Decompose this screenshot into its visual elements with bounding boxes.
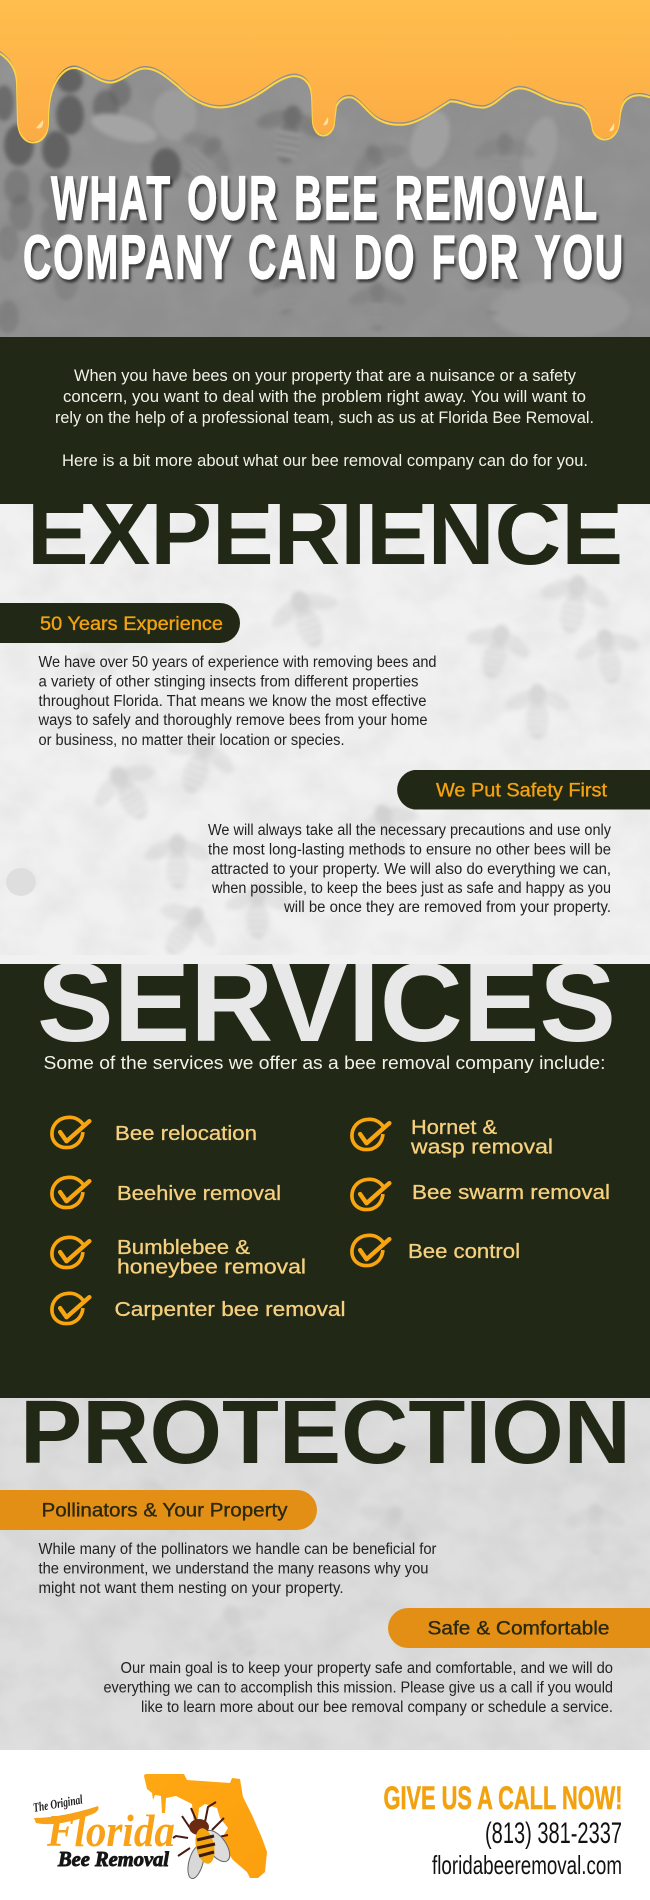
service: hornet and wasp removal: wasp removal bbox=[410, 1136, 553, 1158]
service: bee relocation: Bee relocation bbox=[115, 1123, 257, 1145]
text: safe and comfortable: Our main goal is to keep your property safe and comfortable, and we will do bbox=[120, 1660, 613, 1677]
heading: protection: PROTECTION bbox=[20, 1383, 631, 1483]
logo: orange swoosh bbox=[34, 1806, 99, 1824]
pill: 50 years experience: 50 Years Experience bbox=[40, 614, 223, 635]
text: we put safety first: attracted to your property. We will also do everything we can, bbox=[211, 861, 611, 878]
service: beehive removal: Beehive removal bbox=[117, 1183, 281, 1205]
service: beehive removal bbox=[52, 1177, 281, 1208]
text: 50 years experience bbox=[38, 654, 436, 749]
panel: experience background bbox=[0, 504, 650, 974]
pill: we put safety first: We Put Safety First bbox=[436, 780, 608, 802]
text: 50 years experience: or business, no matter their location or species. bbox=[38, 732, 344, 749]
section: we put safety first bbox=[208, 770, 650, 916]
title bbox=[23, 164, 625, 292]
text: 50 years experience: a variety of other stinging insects from different properties bbox=[38, 674, 419, 690]
service: bee swarm removal bbox=[352, 1179, 610, 1210]
panel: intro band bbox=[0, 337, 650, 504]
pill: 50 years experience bbox=[0, 603, 240, 643]
text: we put safety first: will be once they are removed from your property. bbox=[283, 899, 611, 916]
pill: we put safety first bbox=[397, 770, 650, 810]
service: bee swarm removal: Bee swarm removal bbox=[412, 1182, 610, 1204]
honey drip bbox=[0, 0, 650, 142]
text: 50 years experience: throughout Florida. That means we know the most effective bbox=[38, 693, 426, 710]
service: carpenter bee removal bbox=[52, 1293, 345, 1324]
pill: pollinators and your property: Pollinators & Your Property bbox=[42, 1500, 288, 1522]
panel: services bbox=[0, 940, 650, 1399]
panel: protection background bbox=[0, 1398, 650, 1750]
logo: bee bbox=[173, 1802, 235, 1880]
logo: the original: The Original bbox=[32, 1791, 84, 1815]
text: safe and comfortable bbox=[104, 1660, 613, 1716]
text: 50 years experience: ways to safely and thoroughly remove bees from your home bbox=[38, 712, 427, 729]
service: bumblebee and honeybee removal: honeybee removal bbox=[117, 1256, 306, 1278]
service: carpenter bee removal: Carpenter bee removal bbox=[114, 1299, 346, 1321]
section: 50 years experience bbox=[0, 603, 436, 749]
header photo background bbox=[0, 0, 650, 340]
text: pollinators: While many of the pollinators we handle can be beneficial for bbox=[38, 1541, 436, 1558]
logo: bee removal: Bee Removal bbox=[57, 1847, 169, 1871]
text: pollinators: the environment, we understand the many reasons why you bbox=[38, 1560, 428, 1578]
heading: services: SERVICES bbox=[37, 940, 616, 1065]
pill: pollinators and your property bbox=[0, 1490, 317, 1530]
logo bbox=[32, 1774, 267, 1880]
heading: experience: EXPERIENCE bbox=[27, 484, 623, 583]
service: bee control bbox=[352, 1235, 520, 1266]
text: pollinators bbox=[38, 1541, 436, 1597]
service: hornet and wasp removal bbox=[352, 1117, 553, 1158]
pill: safe and comfortable bbox=[388, 1608, 650, 1648]
logo: florida: Florida bbox=[46, 1805, 175, 1856]
service: bee relocation bbox=[52, 1117, 257, 1148]
service: bee control: Bee control bbox=[408, 1241, 520, 1263]
intro text: When you have bees on your property that are a nuisance or a safety bbox=[74, 367, 577, 385]
services intro: Some of the services we offer as a bee removal company include: bbox=[44, 1052, 606, 1073]
text: 50 years experience: We have over 50 years of experience with removing bees and bbox=[38, 654, 436, 671]
service: bumblebee and honeybee removal bbox=[52, 1237, 306, 1278]
logo: florida map with drips bbox=[144, 1774, 267, 1878]
service: hornet and wasp removal: Hornet & bbox=[411, 1117, 498, 1139]
text: we put safety first: the most long-lasting methods to ensure no other bees will be bbox=[208, 842, 611, 858]
intro text: Here is a bit more about what our bee removal company can do for you. bbox=[62, 452, 588, 470]
text: safe and comfortable: everything we can to accomplish this mission. Please give us a call if you would bbox=[104, 1680, 613, 1696]
pill: safe and comfortable: Safe & Comfortable bbox=[428, 1618, 610, 1640]
service: bumblebee and honeybee removal: Bumblebee & bbox=[117, 1237, 251, 1259]
intro text: rely on the help of a professional team, such as us at Florida Bee Removal. bbox=[55, 409, 594, 427]
intro text: concern, you want to deal with the problem right away. You will want to bbox=[63, 388, 586, 406]
section: pollinators and your property bbox=[0, 1490, 436, 1597]
panel: footer bbox=[0, 1750, 650, 1900]
call to action bbox=[384, 1780, 622, 1880]
text: we put safety first bbox=[208, 822, 611, 916]
text: safe and comfortable: like to learn more about our bee removal company or schedule a service. bbox=[141, 1699, 613, 1716]
intro text bbox=[55, 367, 594, 470]
section: safe and comfortable bbox=[104, 1608, 650, 1716]
text: pollinators: might not want them nesting on your property. bbox=[38, 1580, 344, 1597]
text: we put safety first: when possible, to keep the bees just as safe and happy as you bbox=[211, 880, 611, 897]
text: we put safety first: We will always take all the necessary precautions and use only bbox=[208, 822, 611, 839]
